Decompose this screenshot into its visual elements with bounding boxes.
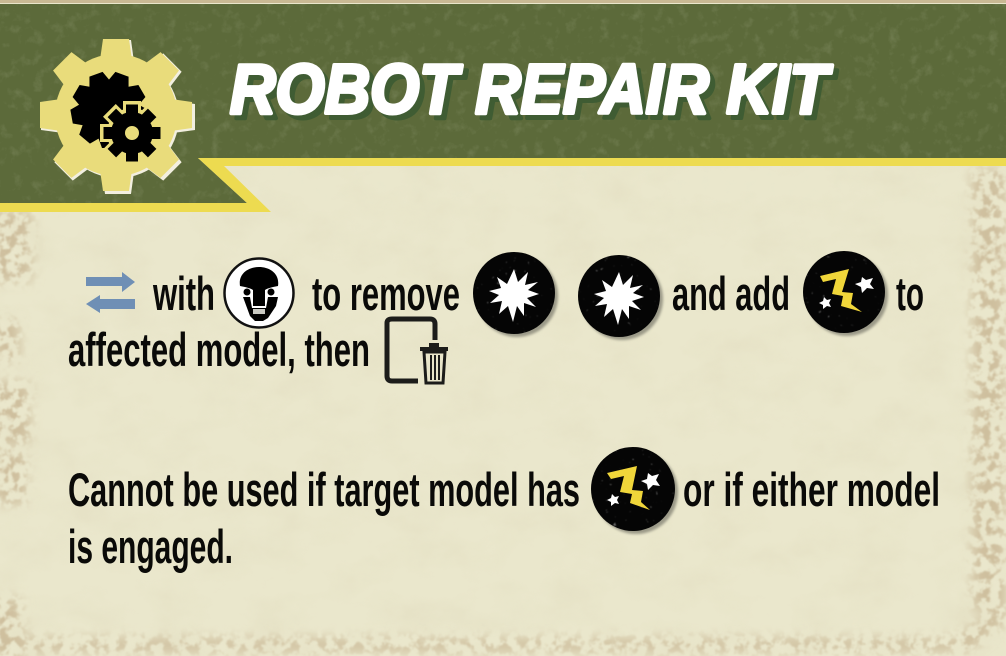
icon: exchange arrows (86, 272, 135, 313)
icon: large black cog (59, 61, 159, 161)
rule text paragraph 1: and add (672, 267, 790, 320)
icon: small black cog (100, 101, 164, 165)
icon: discard card (387, 319, 448, 383)
title: ROBOT REPAIR KIT (230, 50, 833, 128)
banner (0, 4, 1006, 212)
icon: trash can (420, 343, 448, 383)
icon: wound token 2 (578, 255, 663, 340)
rule text paragraph 2: Cannot be used if target model has (68, 463, 580, 516)
icon: disrupt token 1 (803, 251, 888, 336)
rule text paragraph 1: affected model, then (68, 323, 370, 376)
icon: gear badge (40, 39, 195, 194)
rule text paragraph 1: to (896, 267, 924, 320)
rule text paragraph 1 (68, 267, 924, 376)
icon: disrupt token 2 (591, 447, 678, 534)
rule text paragraph 1: with (152, 267, 215, 320)
banner yellow trim (0, 158, 1006, 212)
rule text paragraph 2 (68, 463, 940, 573)
icon: robot token (224, 258, 294, 328)
title: ROBOT REPAIR KIT (235, 55, 838, 133)
icon: wound token 1 (473, 252, 558, 337)
rule text paragraph 1: to remove (312, 267, 460, 320)
rule text paragraph 2: is engaged. (68, 520, 233, 573)
